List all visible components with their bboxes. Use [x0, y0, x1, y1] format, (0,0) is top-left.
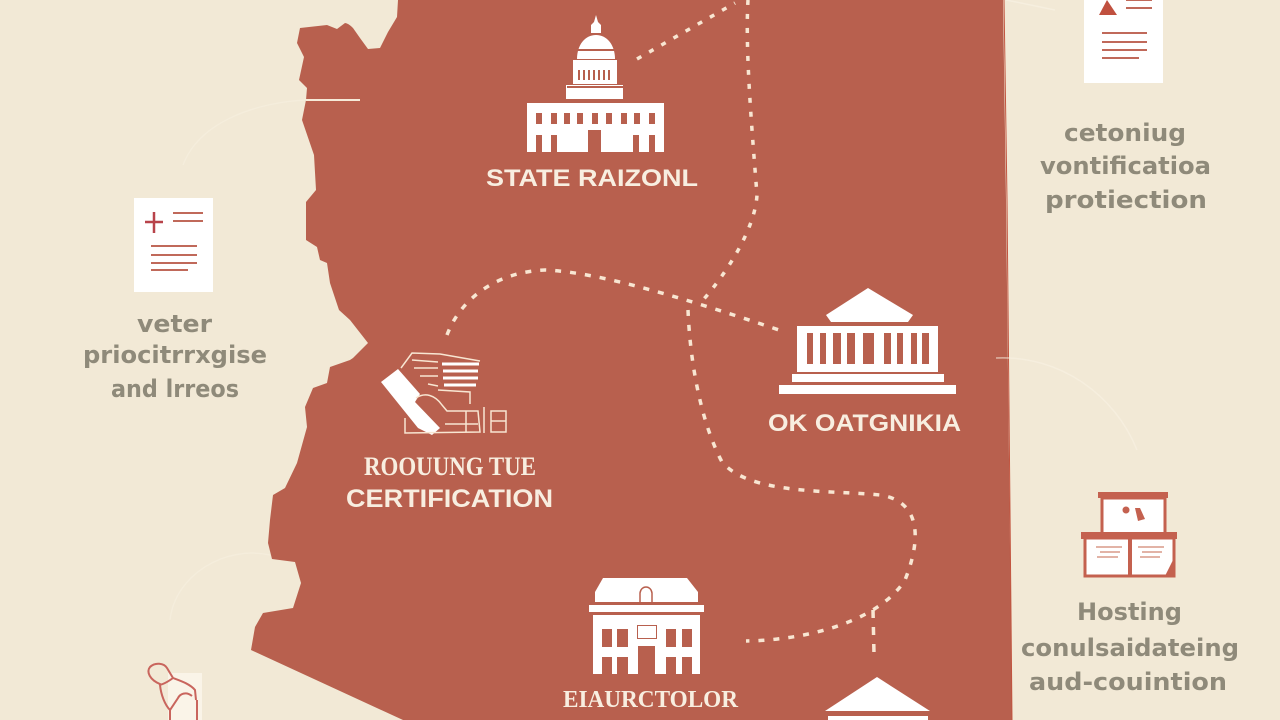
- icon: ballot and records: [381, 353, 506, 435]
- icon: temple courthouse: [779, 288, 956, 394]
- label: temple site: OK OATGNIKIA: [768, 410, 961, 437]
- callout text: right bottom: aud-couintion: [1029, 668, 1227, 696]
- callout text: right bottom: Hosting: [1077, 598, 1182, 626]
- icon: document right: [1084, 0, 1163, 83]
- callout text: right top: [1040, 119, 1211, 214]
- connector line: west callout: [183, 100, 360, 165]
- label: certification: CERTIFICATION: [346, 485, 553, 513]
- callout text: left: veter: [137, 310, 212, 338]
- state map shape: [251, 0, 1012, 720]
- callout text: right bottom: conulsaidateing: [1021, 634, 1239, 662]
- callout text: left: [83, 310, 267, 403]
- map east border shade: [1004, 0, 1012, 720]
- dotted routes: [447, 0, 915, 654]
- callout text: left: and lrreos: [111, 375, 239, 403]
- icon: school building: [589, 578, 704, 674]
- connector line: east callout: [996, 358, 1137, 450]
- icon: capitol building: [527, 15, 664, 152]
- label: state capitol: STATE RAIZONL: [486, 165, 698, 192]
- connector line: north-east callout: [1006, 0, 1055, 10]
- callout text: right top: protiection: [1045, 186, 1207, 214]
- label: recounting: ROOUUNG TUE: [364, 452, 536, 481]
- callout text: left: priocitrrxgise: [83, 341, 267, 369]
- callout text: right top: vontificatioa: [1040, 152, 1211, 180]
- icon: document left: [134, 198, 213, 292]
- icon: hosting boxes: [1081, 492, 1177, 576]
- icon: hand holding ballot: [148, 664, 202, 720]
- callout text: right top: cetoniug: [1064, 119, 1186, 147]
- label: electoral: EIAURCTOLOR: [563, 687, 739, 713]
- callout text: right bottom: [1021, 598, 1239, 696]
- icon: bottom temple: [825, 677, 930, 720]
- connector line: south-west callout: [170, 553, 270, 620]
